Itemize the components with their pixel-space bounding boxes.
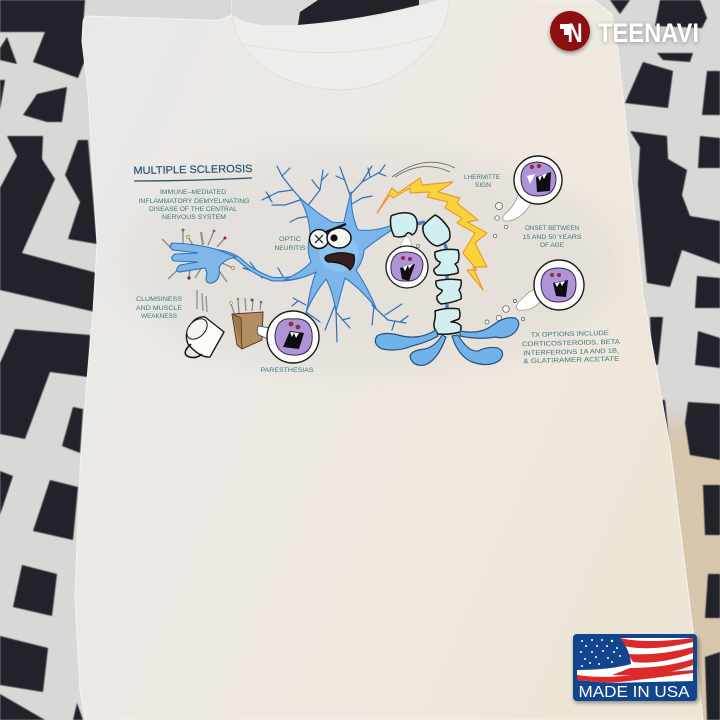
- icon: feet: [375, 318, 519, 365]
- logo: TeeNavi: [550, 11, 699, 53]
- icon: paper bag with pins: [230, 298, 263, 349]
- icon: left eye crossed: [310, 230, 328, 248]
- icon: right eye: [326, 224, 351, 248]
- icon: bubble lower right: [516, 260, 584, 310]
- text: treatment options: [522, 330, 621, 365]
- logo: TeeNavi: TEENAVI: [598, 19, 699, 49]
- text: paresthesias: PARESTHESIAS: [260, 367, 314, 374]
- text: clumsiness: AND MUSCLE: [136, 305, 183, 312]
- spine: vertebrae and legs: [375, 213, 519, 365]
- small thought bubbles: [485, 202, 525, 324]
- icon: bubble top right: [503, 156, 562, 221]
- icon: mug: [183, 290, 224, 358]
- text: onset: ONSET BETWEEN: [525, 225, 579, 232]
- text: definition: IMMUNE–MEDIATED: [160, 189, 226, 196]
- text: clumsiness: CLUMSINESS: [136, 296, 183, 303]
- text: onset: 15 AND 50 YEARS: [522, 234, 582, 241]
- text: definition: INFLAMMATORY DEMYELINATING: [138, 198, 250, 205]
- text: treatment options: INTERFERONS 1A AND 1B,: [523, 348, 619, 357]
- text: treatment options: & GLATIRAMER ACETATE: [523, 356, 620, 365]
- text: lhermitte sign: [464, 174, 501, 189]
- text: definition: [138, 189, 250, 221]
- text: optic neuritis: NEURITIS: [274, 245, 306, 252]
- icon: hand with pins: [162, 228, 236, 283]
- text: clumsiness: [136, 296, 183, 320]
- text: optic neuritis: OPTIC: [279, 236, 301, 243]
- title: MULTIPLE SCLEROSIS: [133, 163, 253, 177]
- text: optic neuritis: [274, 236, 306, 252]
- badge: made in USA: MADE IN USA: [578, 684, 690, 701]
- text: lhermitte sign: LHERMITTE: [464, 174, 501, 181]
- text: onset: OF AGE: [540, 242, 565, 249]
- icon: mouth: [325, 253, 354, 270]
- neuron: cell body and face: [284, 192, 395, 312]
- badge: made in USA: [573, 634, 699, 703]
- logo: TeeNavi: TEENAVI: [598, 18, 699, 48]
- icon: bubble paresthesias: [257, 311, 319, 363]
- t-shirt collar: [232, 0, 449, 90]
- text: lhermitte sign: SIGN: [475, 182, 491, 189]
- icon: american flag: [577, 638, 693, 683]
- neuron: dendrites and axons: [212, 165, 408, 342]
- icon: bubble neck: [386, 230, 428, 288]
- icon: lightning bolt: [377, 162, 487, 290]
- text: onset: [522, 225, 582, 249]
- logo: TeeNavi: N: [568, 18, 582, 48]
- text: clumsiness: WEAKNESS: [141, 313, 178, 320]
- text: treatment options: TX OPTIONS INCLUDE: [531, 330, 609, 339]
- text: treatment options: CORTICOSTEROIDS, BETA: [522, 339, 621, 348]
- text: definition: NERVOUS SYSTEM: [162, 214, 226, 221]
- text: definition: DISEASE OF THE CENTRAL: [149, 206, 237, 213]
